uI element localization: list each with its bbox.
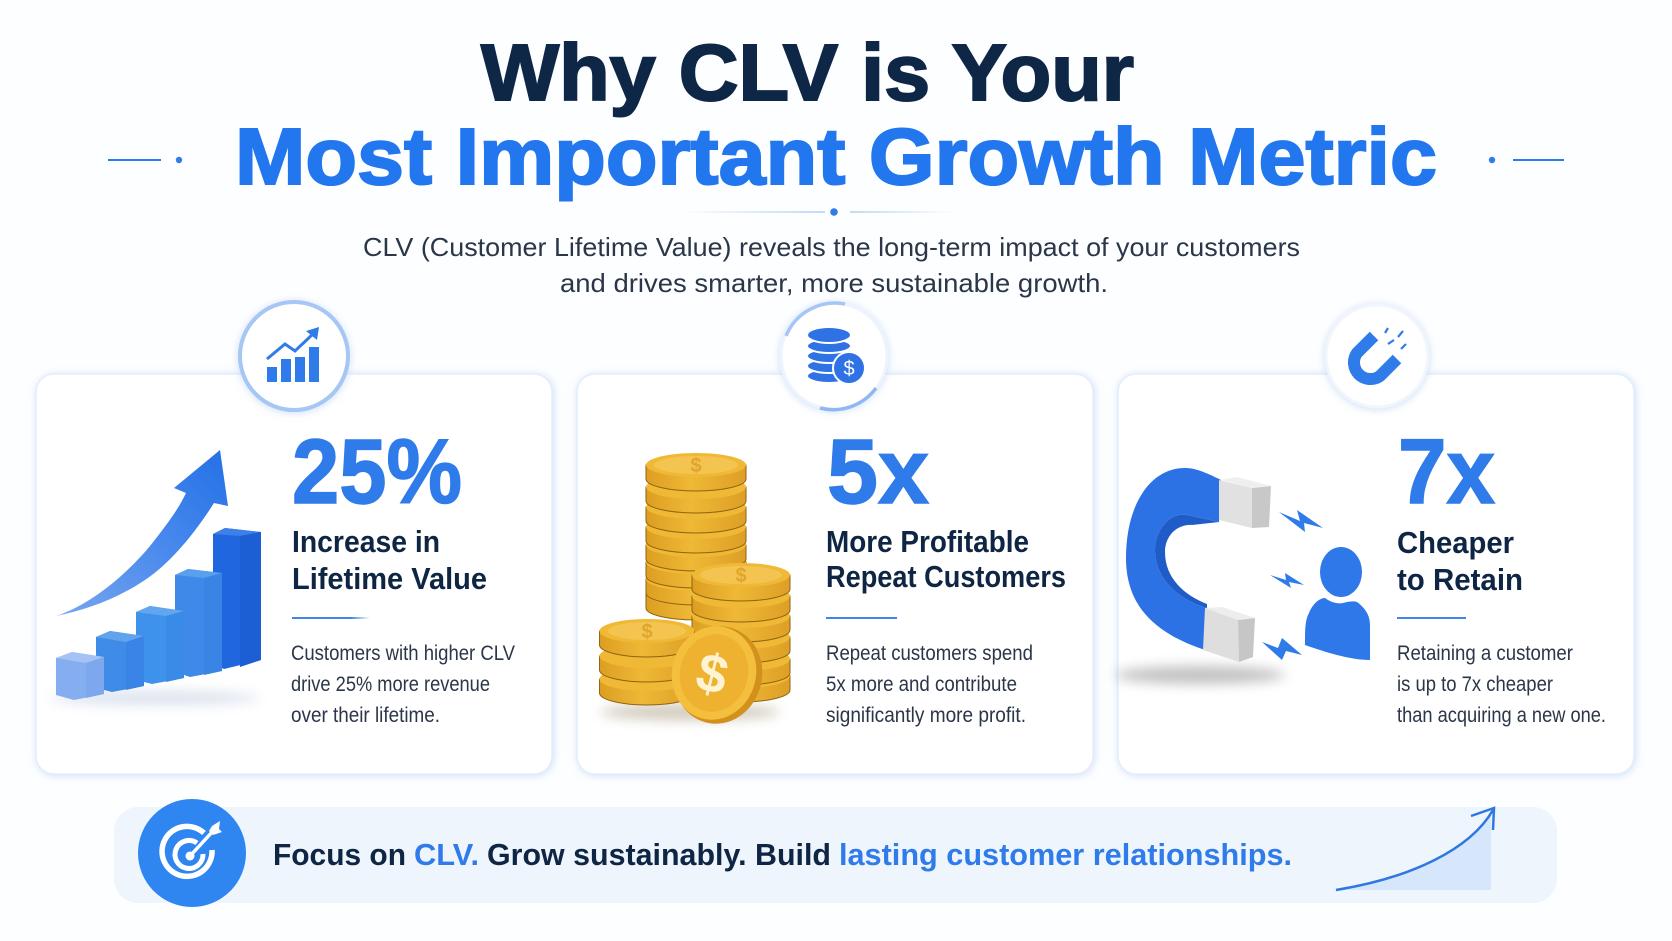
panel: 5x more profitable repeat customers xyxy=(577,303,1093,774)
illustration: gold coin stacks: $ xyxy=(690,641,734,707)
panel: 7x cheaper to retain xyxy=(1115,305,1634,774)
heading: more profitable repeat customers xyxy=(826,524,1066,594)
description xyxy=(1397,642,1606,727)
heading: cheaper to retain: to Retain xyxy=(1397,562,1523,597)
icon badge: coin stack xyxy=(781,303,887,410)
description: over their lifetime. xyxy=(291,704,440,727)
description: Repeat customers spend xyxy=(826,642,1033,665)
stat: 7x: 7x xyxy=(1398,421,1495,523)
subtitle: CLV (Customer Lifetime Value) reveals the long-term impact of your customers xyxy=(363,232,1300,262)
subtitle: and drives smarter, more sustainable growth. xyxy=(560,268,1108,298)
icon badge: magnet xyxy=(1326,305,1428,407)
mini growth curve xyxy=(1336,808,1494,890)
banner message: Focus on xyxy=(273,837,406,872)
icon: target with arrow xyxy=(138,799,246,907)
heading: increase in lifetime value: Increase in xyxy=(292,524,440,559)
description: drive 25% more revenue xyxy=(291,673,490,696)
illustration: magnet attracting customer xyxy=(1115,468,1370,684)
heading: more profitable repeat customers: Repeat Customers xyxy=(826,559,1066,594)
illustration: gold coin stacks: $ xyxy=(641,621,653,643)
description: Retaining a customer xyxy=(1397,642,1573,665)
title: Why CLV is Your xyxy=(481,28,1134,117)
illustration: gold coin stacks: $ xyxy=(690,455,702,477)
heading: cheaper to retain: Cheaper xyxy=(1397,525,1514,560)
panel: 25% increase in lifetime value xyxy=(36,302,552,774)
title: Most Important Growth Metric xyxy=(235,112,1437,201)
description xyxy=(826,642,1033,727)
stat: 25%: 25% xyxy=(292,421,462,523)
illustration: rising bars and arrow xyxy=(50,450,261,705)
banner message: Grow sustainably. Build xyxy=(487,837,831,872)
heading: increase in lifetime value: Lifetime Value xyxy=(292,561,487,596)
illustration: gold coin stacks xyxy=(600,453,790,733)
icon badge: growth chart xyxy=(240,302,348,410)
subtitle xyxy=(363,232,1300,298)
heading: cheaper to retain xyxy=(1397,525,1523,597)
description xyxy=(291,642,515,727)
title xyxy=(235,28,1437,201)
stat: 5x: 5x xyxy=(827,421,929,523)
heading: increase in lifetime value xyxy=(292,524,487,596)
icon badge: coin stack: $ xyxy=(843,358,855,380)
banner message xyxy=(273,837,1292,872)
title flourish left xyxy=(108,157,182,163)
description: is up to 7x cheaper xyxy=(1397,673,1553,696)
description: 5x more and contribute xyxy=(826,673,1017,696)
description: Customers with higher CLV xyxy=(291,642,515,665)
title flourish right xyxy=(1489,157,1564,163)
description: significantly more profit. xyxy=(826,704,1026,727)
description: than acquiring a new one. xyxy=(1397,704,1606,727)
illustration: gold coin stacks: $ xyxy=(735,565,747,587)
banner: key takeaway xyxy=(114,799,1557,907)
banner message: lasting customer relationships. xyxy=(839,837,1292,872)
heading: more profitable repeat customers: More Profitable xyxy=(826,524,1029,559)
banner message: CLV. xyxy=(414,837,479,872)
title underline ornament xyxy=(680,208,955,216)
